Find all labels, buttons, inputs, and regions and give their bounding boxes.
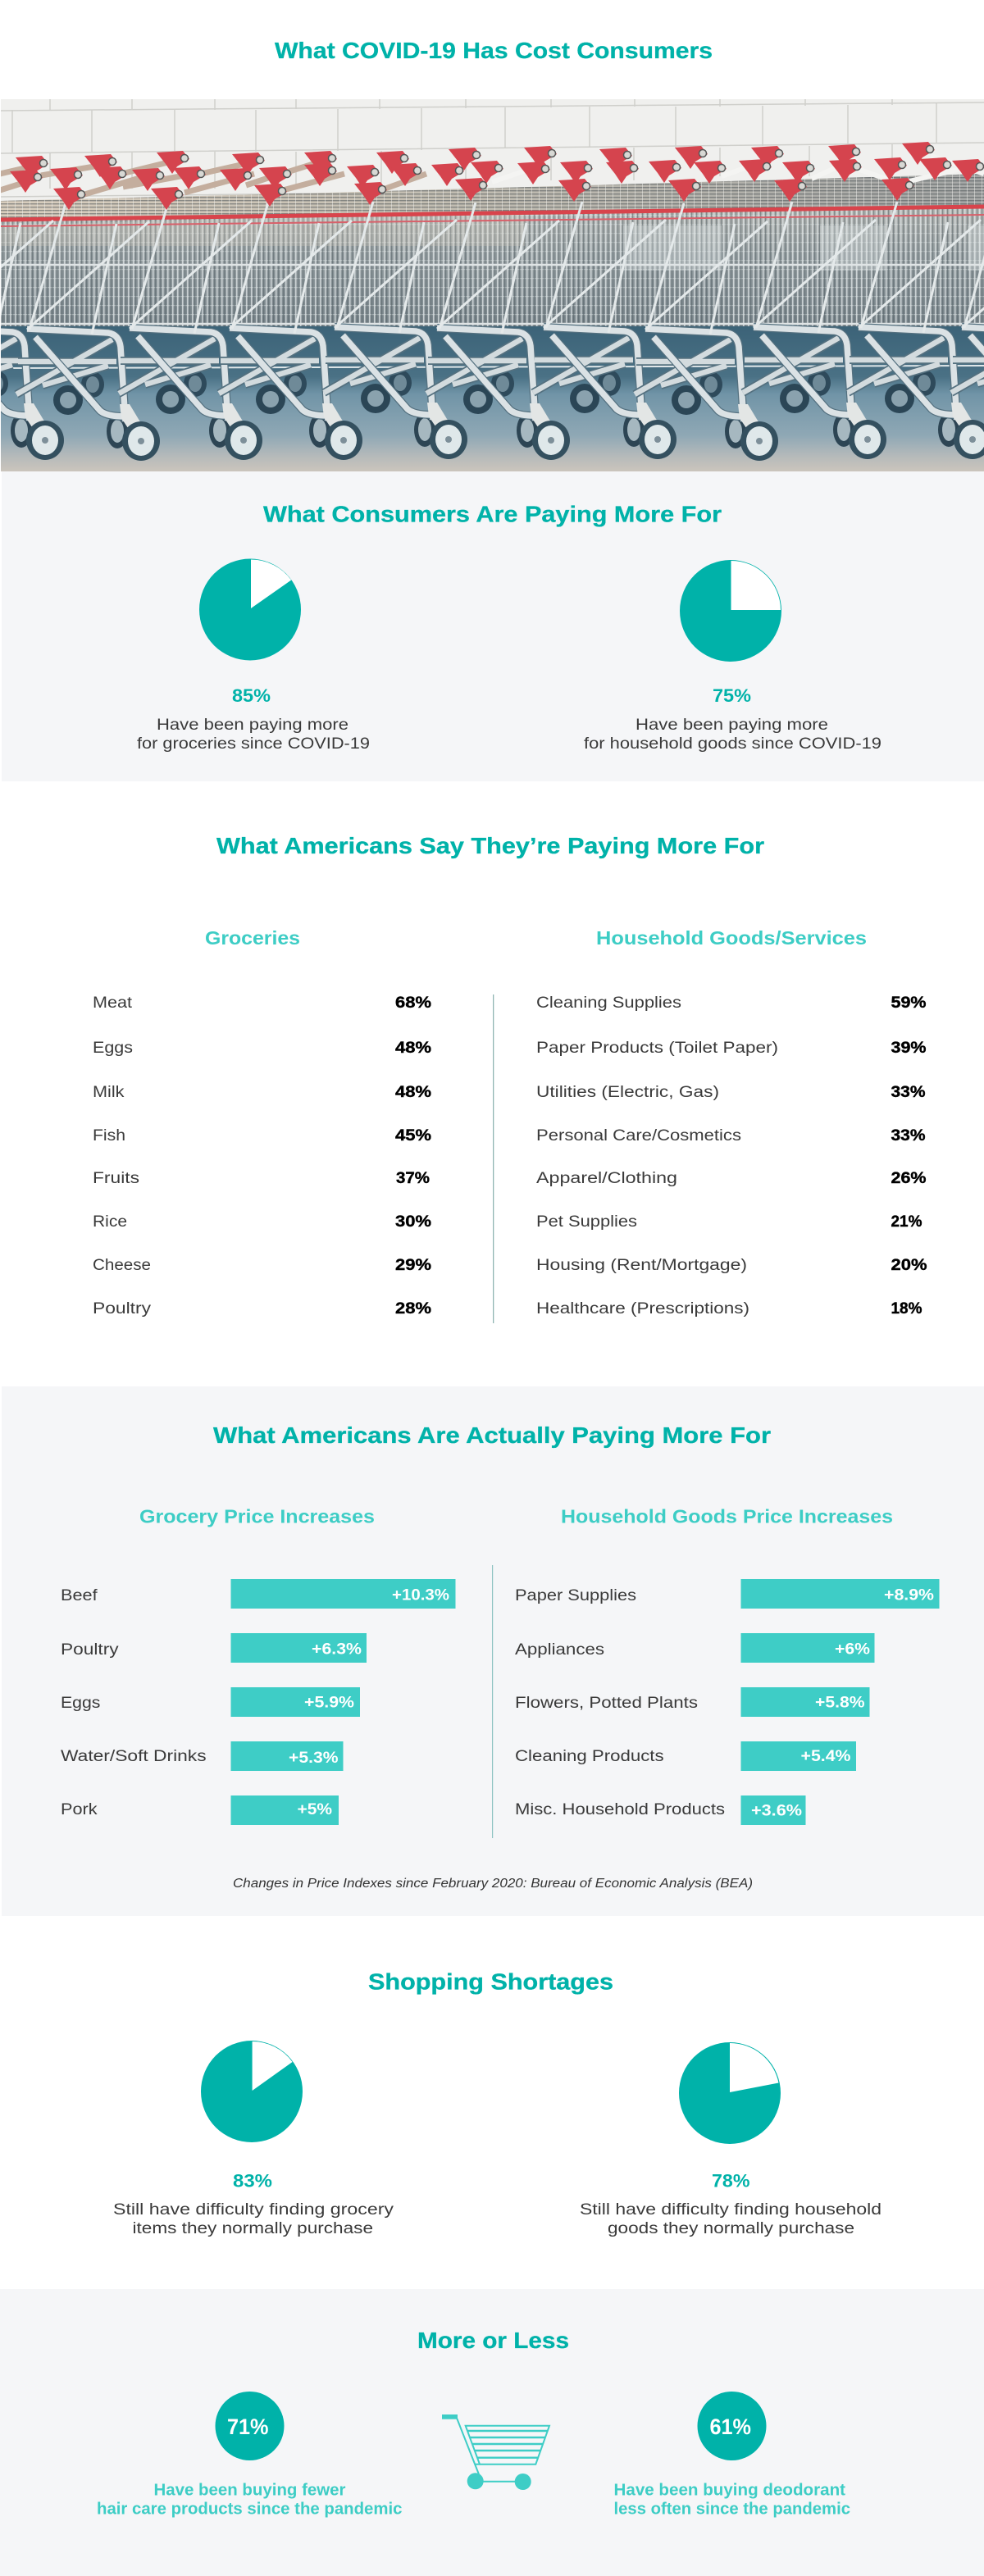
list: household goods — [536, 994, 927, 1318]
heading: What Americans Are Actually Paying More For — [213, 1422, 771, 1448]
icon: shopping cart — [442, 2414, 549, 2490]
list: household goods: Paper Products (Toilet Paper) — [536, 1040, 778, 1057]
list: household goods: 26% — [891, 1170, 927, 1187]
list: household goods: Utilities (Electric, Gas) — [536, 1084, 719, 1101]
panel: shopping shortages — [113, 1969, 882, 2237]
bar chart: grocery price increases: +10.3% — [392, 1587, 449, 1604]
bar chart: grocery price increases: Eggs — [61, 1695, 100, 1712]
caption: deodorant: less often since the pandemic — [613, 2501, 850, 2519]
bar chart: grocery price increases: Poultry — [61, 1641, 119, 1659]
subheading: household goods: Household Goods/Services — [596, 927, 867, 949]
list: groceries: Fish — [93, 1127, 125, 1145]
pie: 85% groceries — [199, 559, 301, 661]
bar chart: household goods price increases: Cleaning Products — [515, 1748, 664, 1765]
list: household goods: 18% — [891, 1300, 922, 1318]
stat: 75%: 75% — [713, 685, 751, 706]
list: groceries: Eggs — [93, 1040, 133, 1057]
list: household goods: 33% — [891, 1084, 926, 1101]
list: groceries: Poultry — [93, 1300, 152, 1318]
panel: more or less — [0, 2289, 984, 2576]
caption: hair care — [97, 2481, 402, 2519]
source note: Changes in Price Indexes since February 2020: Bureau of Economic Analysis (BEA) — [233, 1877, 753, 1891]
stat: 78%: Still have difficulty finding household — [580, 2201, 882, 2219]
panel: what Americans are actually paying more for — [2, 1386, 984, 1916]
stat: 78%: 78% — [712, 2171, 749, 2191]
panel: what consumers are paying more for — [2, 471, 984, 781]
stat: 85% — [137, 685, 370, 753]
list: groceries: Milk — [93, 1084, 125, 1101]
caption: deodorant: Have been buying deodorant — [613, 2481, 845, 2499]
list: groceries: Meat — [93, 994, 133, 1012]
heading: More or Less — [417, 2328, 569, 2353]
bar chart: household goods price increases: +5.4% — [800, 1748, 851, 1765]
badge: 61%: 61% — [710, 2414, 751, 2439]
stat: 83%: 83% — [233, 2171, 272, 2191]
badge: 71%: 71% — [227, 2414, 269, 2439]
bar chart: grocery price increases: +6.3% — [312, 1641, 362, 1658]
bar chart: household goods price increases: Flowers, Potted Plants — [515, 1695, 698, 1712]
stat: 78% — [580, 2171, 882, 2237]
bar chart: household goods price increases: Paper Supplies — [515, 1587, 636, 1604]
subheading: grocery price increases: Grocery Price Increases — [139, 1505, 375, 1527]
bar chart: household goods price increases: +6% — [835, 1641, 870, 1658]
list: groceries: Fruits — [93, 1170, 139, 1187]
bar chart: grocery price increases: +5.3% — [289, 1750, 339, 1767]
list: groceries: 37% — [396, 1170, 430, 1187]
list: household goods: 21% — [891, 1213, 922, 1231]
list: household goods: Healthcare (Prescriptions) — [536, 1300, 749, 1318]
list: household goods: Housing (Rent/Mortgage) — [536, 1257, 747, 1274]
list: groceries: 48% — [395, 1040, 431, 1057]
list: household goods: Pet Supplies — [536, 1213, 637, 1231]
pie: 83% grocery shortages — [201, 2041, 303, 2142]
bar chart: household goods price increases — [515, 1579, 940, 1825]
list: groceries: Cheese — [93, 1257, 151, 1274]
pie: 78% household shortages — [679, 2042, 781, 2144]
heading: What Consumers Are Paying More For — [263, 502, 722, 526]
list: groceries: 29% — [395, 1257, 431, 1274]
list: household goods: Apparel/Clothing — [536, 1170, 677, 1187]
stat: 85%: 85% — [232, 685, 271, 706]
list: household goods: Cleaning Supplies — [536, 994, 681, 1012]
subheading: household goods price increases: Household Goods Price Increases — [561, 1505, 893, 1527]
list: groceries: Rice — [93, 1213, 127, 1231]
bar chart: grocery price increases: +5.9% — [304, 1694, 354, 1712]
heading: What Americans Say They’re Paying More For — [216, 833, 764, 858]
panel: what Americans say they're paying more for — [93, 833, 927, 1323]
list: groceries: 48% — [395, 1084, 431, 1101]
photo: row of shopping carts — [0, 99, 984, 471]
bar chart: household goods price increases: Misc. Household Products — [515, 1801, 725, 1818]
bar chart: household goods price increases: +8.9% — [884, 1587, 934, 1604]
bar chart: grocery price increases — [61, 1579, 456, 1825]
list: household goods: 39% — [891, 1040, 927, 1057]
bar chart: grocery price increases: +5% — [297, 1801, 332, 1818]
list: household goods: 59% — [891, 994, 927, 1012]
stat: 75% — [584, 685, 882, 753]
caption: hair care: Have been buying fewer — [154, 2481, 346, 2499]
bar chart: household goods price increases: +3.6% — [751, 1802, 802, 1820]
list: groceries: 68% — [395, 994, 431, 1012]
list: groceries: 28% — [395, 1300, 431, 1318]
list: groceries — [93, 994, 431, 1318]
bar chart: household goods price increases: Appliances — [515, 1641, 604, 1659]
pie: 75% household goods — [680, 560, 781, 662]
caption: hair care: hair care products since the pandemic — [97, 2501, 402, 2519]
bar chart: grocery price increases: Pork — [61, 1801, 98, 1818]
stat: 75%: Have been paying more — [636, 717, 828, 734]
stat: 83%: Still have difficulty finding grocery — [113, 2201, 394, 2219]
stat: 83%: items they normally purchase — [133, 2220, 373, 2237]
heading: Shopping Shortages — [368, 1969, 613, 1994]
bar chart: grocery price increases: Beef — [61, 1587, 98, 1604]
stat: 78%: goods they normally purchase — [608, 2220, 854, 2237]
caption: deodorant — [613, 2481, 850, 2519]
list: groceries: 30% — [395, 1213, 431, 1231]
title: What COVID-19 Has Cost Consumers — [275, 38, 713, 63]
badge: 61% — [697, 2392, 766, 2460]
stat: 83% — [113, 2171, 394, 2237]
stat: 85%: for groceries since COVID-19 — [137, 735, 370, 753]
bar chart: grocery price increases: Water/Soft Drinks — [61, 1748, 207, 1765]
list: groceries: 45% — [395, 1127, 431, 1145]
subheading: groceries: Groceries — [205, 927, 300, 949]
stat: 75%: for household goods since COVID-19 — [584, 735, 882, 753]
stat: 85%: Have been paying more — [157, 717, 348, 734]
list: household goods: Personal Care/Cosmetics — [536, 1127, 741, 1145]
list: household goods: 33% — [891, 1127, 926, 1145]
badge: 71% — [215, 2392, 284, 2460]
list: household goods: 20% — [891, 1257, 927, 1274]
bar chart: household goods price increases: +5.8% — [815, 1694, 865, 1712]
